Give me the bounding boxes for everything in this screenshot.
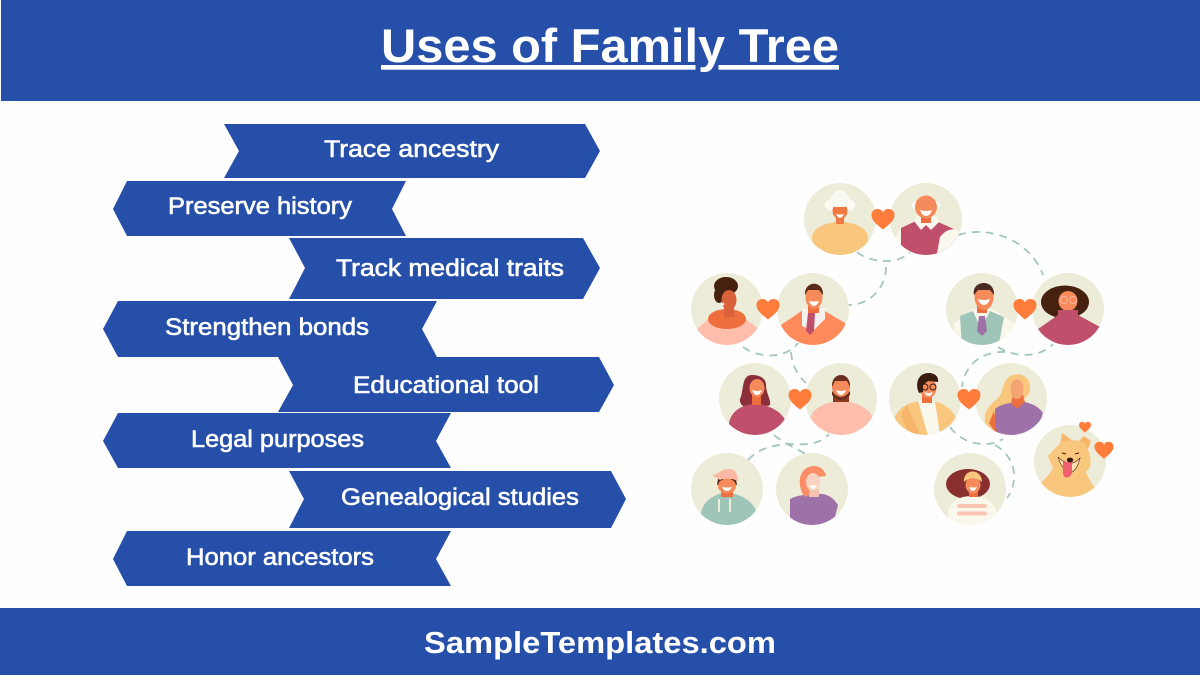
dashed connectors — [743, 232, 1053, 498]
heart: dog large — [1094, 442, 1114, 459]
arrow: Trace ancestry: Trace ancestry — [324, 136, 499, 163]
person: father right couple — [946, 273, 1018, 349]
person: girl with red hair — [776, 453, 848, 529]
arrow: Genealogical studies — [289, 471, 626, 528]
footer text: SampleTemplates.com — [424, 625, 776, 660]
arrow: Honor ancestors — [113, 531, 451, 586]
person: son-in-law — [805, 363, 877, 439]
person: grandfather — [890, 183, 964, 259]
footer band — [0, 608, 1200, 675]
arrow: Preserve history — [113, 181, 406, 236]
person: father left couple — [777, 273, 849, 349]
arrow: Honor ancestors: Honor ancestors — [186, 544, 374, 571]
arrow: Preserve history: Preserve history — [168, 193, 352, 220]
family tree illustration — [691, 183, 1114, 529]
heart: left couple — [756, 299, 780, 320]
person: mother right couple — [1032, 273, 1104, 349]
arrow: Strengthen bonds: Strengthen bonds — [165, 314, 369, 341]
arrow: Track medical traits — [289, 238, 600, 299]
person: son with glasses — [889, 363, 961, 439]
person: boy with cap — [691, 453, 763, 529]
heart: son couple — [958, 389, 980, 410]
person: blonde wife — [975, 363, 1047, 439]
arrow: Legal purposes — [103, 413, 451, 468]
arrow: Track medical traits: Track medical traits — [336, 255, 564, 282]
arrow: Strengthen bonds — [103, 301, 437, 357]
heart: grandparents — [872, 209, 894, 230]
arrow: Educational tool — [278, 357, 614, 412]
arrow: Trace ancestry — [224, 124, 600, 178]
person: mother left couple — [691, 273, 763, 349]
header band — [1, 0, 1200, 101]
arrow: Legal purposes: Legal purposes — [191, 426, 364, 453]
heart: right couple — [1014, 299, 1036, 320]
heart: daughter couple — [788, 389, 812, 410]
panel: arrow list of uses — [103, 124, 626, 586]
arrow: Genealogical studies: Genealogical studies — [341, 484, 579, 511]
heart: dog small — [1079, 422, 1091, 432]
person: girl with curly hair — [934, 453, 1006, 529]
person: grandmother — [804, 183, 876, 259]
person: daughter — [719, 363, 791, 439]
icon: golden dog — [1034, 425, 1106, 501]
arrow: Educational tool: Educational tool — [353, 372, 539, 399]
title: Uses of Family Tree — [381, 19, 839, 72]
